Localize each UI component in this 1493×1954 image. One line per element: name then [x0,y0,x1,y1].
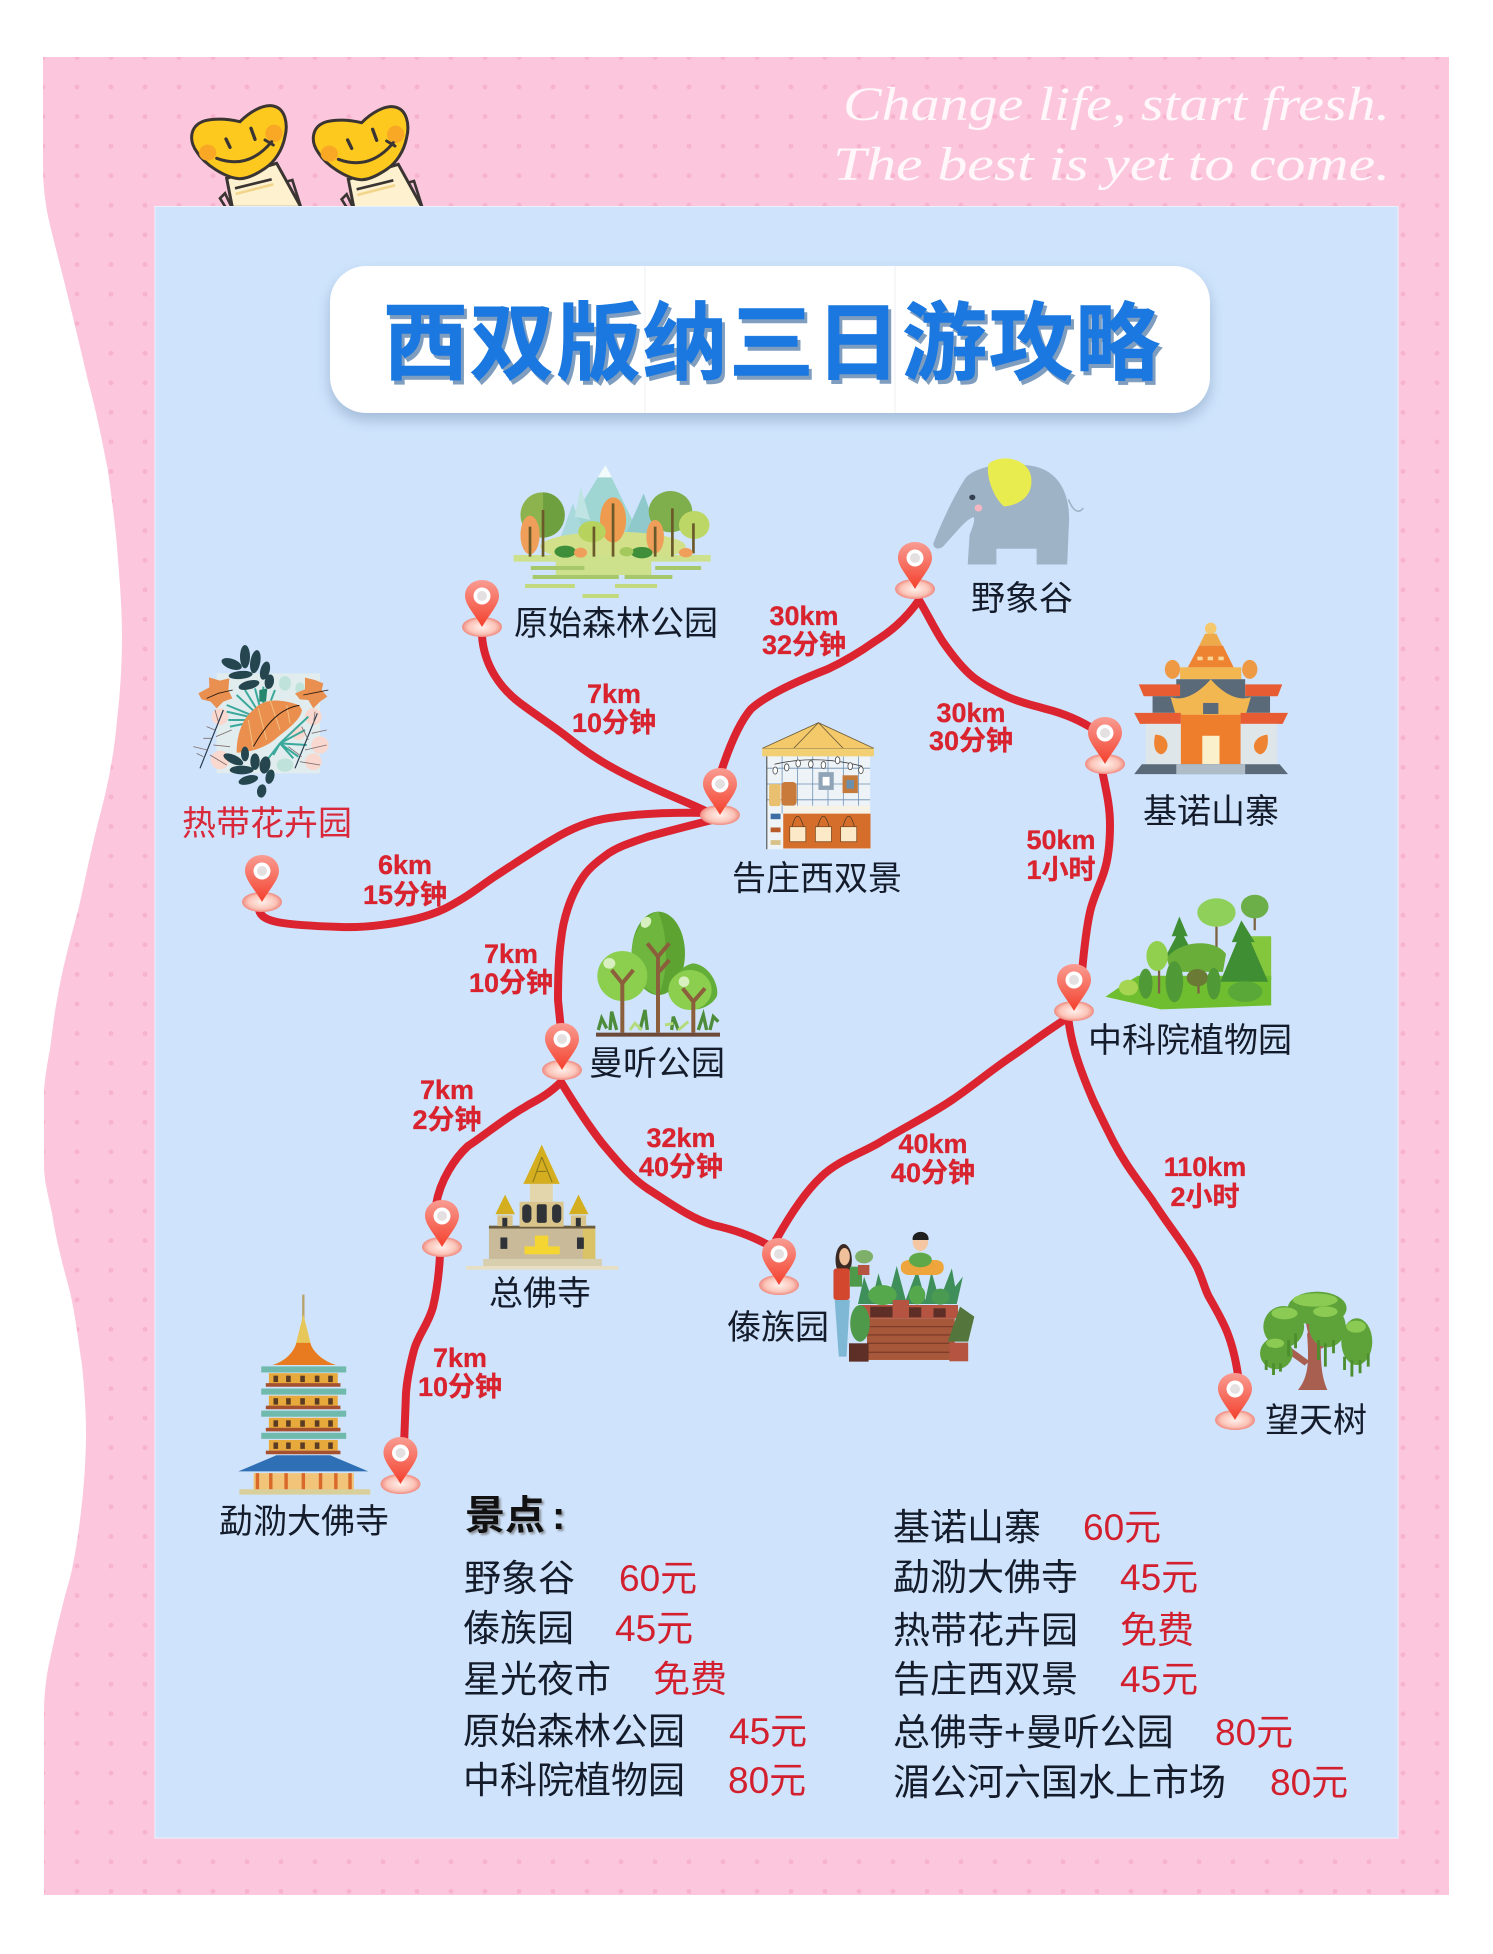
price: 勐泐大佛寺: 45元 [1120,1557,1198,1598]
price: 基诺山寨: 基诺山寨 [893,1507,1041,1548]
label: 野象谷: 野象谷 [971,580,1073,618]
route lines [259,600,1238,1445]
panel: ticket prices [463,1494,1348,1803]
distance: Manting to Dai village: 32km [646,1123,716,1153]
price: 总佛寺+曼听公园: 80元 [1215,1712,1293,1753]
distance: Jino to botanical garden: 50km [1026,825,1096,855]
place labels [182,580,1367,1541]
icon: right smiley finger [313,107,423,208]
distance: flower garden to Gaozhuang: 6km [378,850,432,880]
slogan: script text: Change life, start fresh. [843,78,1390,131]
icon: botanical garden [1105,895,1271,1009]
distance: botanical garden to Wangtian tree: 2小时 [1170,1182,1240,1212]
distance: Jino to botanical garden: 1小时 [1026,855,1096,885]
icon: elephant [933,458,1083,565]
price: 告庄西双景: 45元 [1120,1659,1198,1700]
label: 原始森林公园: 原始森林公园 [514,605,718,643]
label: 中科院植物园: 中科院植物园 [1088,1022,1292,1060]
label: 告庄西双景: 告庄西双景 [732,860,902,898]
heading: 景点: 景点: [465,1494,565,1538]
price: 热带花卉园: 热带花卉园 [893,1610,1078,1651]
distance: Wild Elephant Valley to Jino: 30km [936,698,1006,728]
icon: tropical flowers [193,645,329,798]
distance: Gaozhuang to Wild Elephant Valley: 32分钟 [762,630,846,660]
price: 傣族园: 45元 [615,1608,693,1649]
pin: 告庄西双景 [700,768,740,825]
icon: left smiley finger [192,106,301,207]
price: 湄公河六国水上市场: 湄公河六国水上市场 [893,1762,1226,1803]
price: 星光夜市: 星光夜市 [463,1659,611,1700]
pin: 基诺山寨 [1085,717,1125,774]
price: 中科院植物园: 中科院植物园 [463,1760,685,1801]
distance: Gaozhuang to Wild Elephant Valley: 30km [769,601,839,631]
price: 傣族园: 傣族园 [463,1608,574,1649]
price: 基诺山寨: 60元 [1083,1507,1161,1548]
distance: Manting to Zongfo temple: 7km [420,1075,474,1105]
distance: botanical garden to Wangtian tree: 110km [1164,1152,1246,1182]
icon: Manting park trees [596,912,720,1037]
icon: banyan tree [1260,1292,1372,1390]
pin: 望天树 [1215,1373,1255,1430]
pin: 原始森林公园 [462,580,502,637]
pin: 总佛寺 [422,1200,462,1257]
map pins [242,542,1255,1494]
price: 原始森林公园: 原始森林公园 [463,1711,685,1752]
title card [330,266,1210,413]
distance: Wild Elephant Valley to Jino: 30分钟 [929,726,1013,756]
icon: Dai village plant stall [833,1232,974,1362]
pin: 热带花卉园 [242,855,282,912]
pin: 勐泐大佛寺 [380,1437,420,1494]
pin: 中科院植物园 [1054,964,1094,1021]
panel: blue map area [155,206,1398,1838]
distance: Gaozhuang to Manting: 10分钟 [469,968,553,998]
icon: smiley heart fingers [192,106,423,208]
icon: Jino temple [1134,623,1288,774]
pin: 野象谷 [895,542,935,599]
distance: forest park to Gaozhuang: 7km [587,679,641,709]
label: 基诺山寨: 基诺山寨 [1143,793,1279,831]
label: 望天树: 望天树 [1265,1402,1367,1440]
price: 热带花卉园: 免费 [1120,1610,1194,1651]
label: 傣族园: 傣族园 [727,1309,829,1347]
distance: Gaozhuang to Manting: 7km [484,939,538,969]
distance: Dai village to botanical garden: 40分钟 [891,1158,975,1188]
route distance labels [363,601,1246,1402]
distance: forest park to Gaozhuang: 10分钟 [572,708,656,738]
pin: 傣族园 [759,1238,799,1295]
distance: Manting to Dai village: 40分钟 [639,1152,723,1182]
distance: flower garden to Gaozhuang: 15分钟 [363,880,447,910]
price: 告庄西双景: 告庄西双景 [893,1659,1078,1700]
label: 总佛寺: 总佛寺 [489,1275,591,1313]
pin: 曼听公园 [542,1023,582,1080]
price: 原始森林公园: 45元 [729,1711,807,1752]
price: 总佛寺+曼听公园: 总佛寺+曼听公园 [893,1712,1174,1753]
title: 西双版纳三日游攻略 [383,297,1160,392]
distance: Manting to Zongfo temple: 2分钟 [412,1105,482,1135]
label: 热带花卉园: 热带花卉园 [182,805,352,843]
slogan: script text [833,78,1390,191]
icon: Mengle pagoda [238,1295,370,1495]
icon: forest park [514,465,711,598]
icon: Zongfo temple [466,1145,618,1270]
price: 中科院植物园: 80元 [728,1760,806,1801]
price: 勐泐大佛寺: 勐泐大佛寺 [893,1557,1078,1598]
price: 野象谷: 野象谷 [464,1558,575,1599]
price: 野象谷: 60元 [619,1558,697,1599]
distance: Zongfo to Mengle: 7km [433,1343,487,1373]
distance: Dai village to botanical garden: 40km [898,1129,968,1159]
label: 勐泐大佛寺: 勐泐大佛寺 [219,1503,389,1541]
distance: Zongfo to Mengle: 10分钟 [418,1372,502,1402]
slogan: script text: The best is yet to come. [833,138,1390,191]
price: 湄公河六国水上市场: 80元 [1270,1762,1348,1803]
price: 星光夜市: 免费 [653,1659,727,1700]
icon: market stall [762,723,874,849]
label: 曼听公园: 曼听公园 [589,1045,725,1083]
